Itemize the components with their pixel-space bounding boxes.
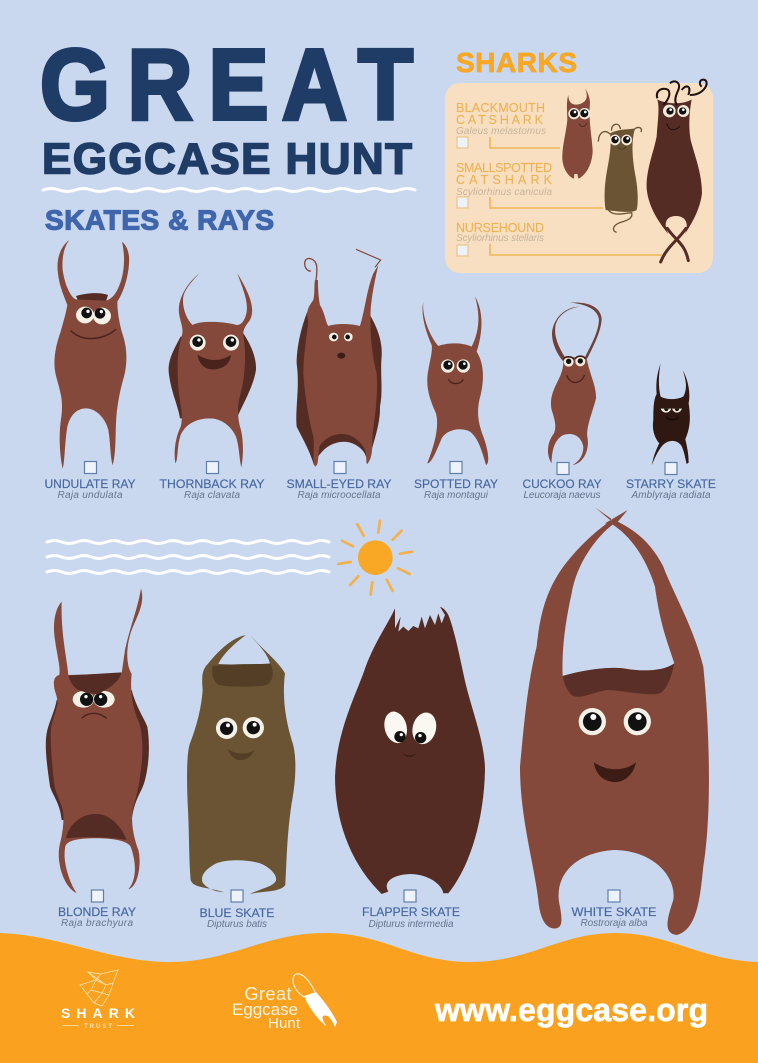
eggcase: nursehound <box>647 80 707 262</box>
title: GREAT <box>40 30 413 141</box>
eggcase: white skate <box>520 507 709 935</box>
logo: great eggcase hunt: Great <box>244 984 292 1004</box>
eggcase: flapper skate <box>335 607 485 894</box>
footer wave <box>0 933 758 1063</box>
logo: great eggcase hunt: Eggcase <box>232 1000 298 1019</box>
labels: bottom row of skates and rays: Dipturus intermedia <box>368 919 454 930</box>
panel: sharks <box>445 80 713 273</box>
shark label: smallspotted catshark: Scyliorhinus canicula <box>456 187 552 198</box>
heading: sharks: SHARKS <box>456 47 577 78</box>
logo: shark trust <box>61 970 135 1030</box>
labels: bottom row of skates and rays: Rostroraja alba <box>580 918 648 929</box>
title: EGGCASE HUNT <box>42 134 412 184</box>
eggcase: blonde ray <box>46 588 149 893</box>
shark label: blackmouth catshark: CATSHARK <box>456 113 544 127</box>
shark label: smallspotted catshark: SMALLSPOTTED <box>456 161 552 175</box>
labels: bottom row of skates and rays: Raja brachyura <box>61 918 133 929</box>
labels: top row of skates and rays: STARRY SKATE <box>626 477 716 491</box>
shark label: nursehound: Scyliorhinus stellaris <box>456 233 544 244</box>
labels: top row of skates and rays: CUCKOO RAY <box>522 477 602 491</box>
eggcase: smallspotted catshark <box>598 124 641 232</box>
labels: top row of skates and rays <box>44 462 716 501</box>
labels: bottom row of skates and rays: Dipturus batis <box>207 919 267 930</box>
shark label: nursehound <box>456 221 662 256</box>
website address: www.eggcase.org <box>434 992 708 1028</box>
eggcase: blackmouth catshark <box>562 88 593 179</box>
logo: shark trust: TRUST <box>84 1024 112 1030</box>
shark label: smallspotted catshark <box>456 161 603 208</box>
labels: bottom row of skates and rays <box>58 890 656 930</box>
labels: top row of skates and rays: SPOTTED RAY <box>414 477 498 491</box>
labels: top row of skates and rays: Leucoraja naevus <box>524 490 600 501</box>
logo: shark trust: SHARK <box>61 1005 135 1021</box>
eggcase: thornback ray <box>169 273 256 467</box>
labels: bottom row of skates and rays: WHITE SKATE <box>572 905 656 919</box>
shark label: blackmouth catshark: Galeus melastomus <box>456 126 546 137</box>
labels: bottom row of skates and rays: BLONDE RAY <box>58 905 136 919</box>
icon: eggcase outline <box>293 974 337 1027</box>
labels: top row of skates and rays: Raja clavata <box>184 490 240 501</box>
labels: top row of skates and rays: Amblyraja radiata <box>630 490 711 501</box>
logo: great eggcase hunt <box>232 974 337 1032</box>
eggcase: undulate ray <box>54 240 129 469</box>
labels: top row of skates and rays: THORNBACK RAY <box>160 477 264 491</box>
eggcase: small-eyed ray <box>296 249 382 467</box>
logo: great eggcase hunt: Hunt <box>268 1015 301 1032</box>
labels: top row of skates and rays: UNDULATE RAY <box>44 477 136 491</box>
icon: sun <box>338 521 412 595</box>
labels: top row of skates and rays: Raja montagui <box>424 490 489 501</box>
labels: bottom row of skates and rays: BLUE SKATE <box>200 906 274 920</box>
eggcase: starry skate <box>652 363 690 465</box>
shark label: blackmouth catshark: BLACKMOUTH <box>456 101 545 115</box>
eggcase: spotted ray <box>423 297 488 465</box>
labels: top row of skates and rays: Raja microocellata <box>298 490 381 501</box>
heading: skates and rays: SKATES & RAYS <box>45 204 274 236</box>
eggcase: cuckoo ray <box>548 302 602 465</box>
wavy lines <box>47 540 329 574</box>
shark label: nursehound: NURSEHOUND <box>456 221 544 235</box>
shark label: blackmouth catshark <box>456 101 560 148</box>
shark label: smallspotted catshark: CATSHARK <box>456 173 553 187</box>
labels: top row of skates and rays: Raja undulata <box>58 490 123 501</box>
labels: top row of skates and rays: SMALL-EYED RAY <box>286 477 392 491</box>
labels: bottom row of skates and rays: FLAPPER SKATE <box>362 905 460 919</box>
eggcase: blue skate <box>187 635 295 894</box>
icon: geometric shark <box>80 970 118 1006</box>
